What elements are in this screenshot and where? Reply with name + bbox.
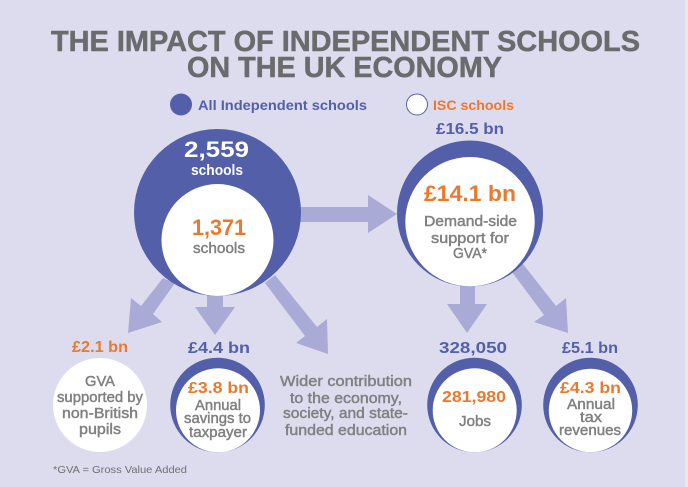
circle: annual savings to taxpayer: savings to	[184, 411, 251, 427]
circle: all independent schools: 2,559	[184, 137, 249, 162]
circle: GVA supported by non-British pupils	[53, 358, 147, 452]
value: £5.1 bn: £5.1 bn	[562, 340, 618, 357]
circle: annual savings to taxpayer: £3.8 bn	[188, 380, 249, 397]
circle: all independent schools	[134, 129, 301, 296]
value: 328,050: 328,050	[439, 340, 507, 357]
legend: all independent schools	[170, 94, 367, 116]
legend	[170, 94, 514, 116]
circle: annual tax revenues	[543, 358, 638, 452]
legend: all independent schools: All Independent schools	[198, 97, 367, 113]
circle: ISC schools	[162, 184, 274, 296]
legend: ISC schools	[406, 94, 514, 115]
arrow: schools to demand-side support	[300, 195, 397, 233]
text: wider contribution: to the economy,	[290, 391, 402, 407]
circle: annual tax revenues: revenues	[559, 423, 621, 439]
circle: jobs: 281,980	[442, 389, 506, 406]
value: £4.4 bn: £4.4 bn	[188, 340, 250, 357]
circle: GVA supported by non-British pupils: non-British	[62, 406, 138, 422]
circle: annual tax revenues: Annual	[567, 397, 615, 413]
circle: demand-side support for GVA: support for	[431, 231, 509, 247]
footnote: *GVA = Gross Value Added	[53, 464, 187, 476]
circle: annual savings to taxpayer	[170, 358, 265, 452]
circle: jobs	[427, 358, 522, 452]
text: wider contribution: society, and state-	[283, 406, 408, 422]
text: wider contribution	[280, 374, 412, 439]
circle: annual savings to taxpayer: taxpayer	[189, 425, 247, 441]
title: THE IMPACT OF INDEPENDENT SCHOOLS	[51, 26, 640, 58]
circle: GVA supported by non-British pupils: GVA	[85, 374, 115, 390]
text: wider contribution: funded education	[285, 423, 407, 439]
circle: annual tax revenues: tax	[580, 410, 603, 426]
value: £2.1 bn: £2.1 bn	[72, 339, 128, 356]
text: wider contribution: Wider contribution	[280, 374, 412, 390]
legend: ISC schools: ISC schools	[433, 97, 514, 113]
circle: GVA supported by non-British pupils: pupils	[79, 422, 121, 438]
title	[51, 26, 640, 84]
arrow: to tax revenues	[512, 264, 568, 333]
title: ON THE UK ECONOMY	[187, 52, 502, 84]
arrow: to jobs	[447, 284, 487, 333]
circle: demand-side support for GVA: £14.1 bn	[424, 181, 516, 206]
circle: annual tax revenues: £4.3 bn	[560, 380, 621, 397]
value: £16.5 bn: £16.5 bn	[436, 121, 504, 138]
arrow: to non-British pupils	[128, 278, 175, 333]
circle: all independent schools: schools	[191, 162, 243, 179]
circle: ISC schools: 1,371	[192, 215, 246, 240]
circle: demand-side support for GVA: Demand-side	[424, 214, 517, 230]
circle: demand-side support for GVA: GVA*	[453, 246, 487, 262]
circle: ISC schools: schools	[193, 240, 245, 257]
circle: GVA supported by non-British pupils: supported by	[57, 390, 144, 406]
circle: annual savings to taxpayer: Annual	[195, 398, 241, 414]
circle: jobs: Jobs	[459, 414, 491, 430]
arrow: to wider contribution	[265, 275, 328, 354]
arrow: to savings to taxpayer	[195, 294, 235, 335]
circle: demand-side support for GVA	[397, 140, 543, 286]
